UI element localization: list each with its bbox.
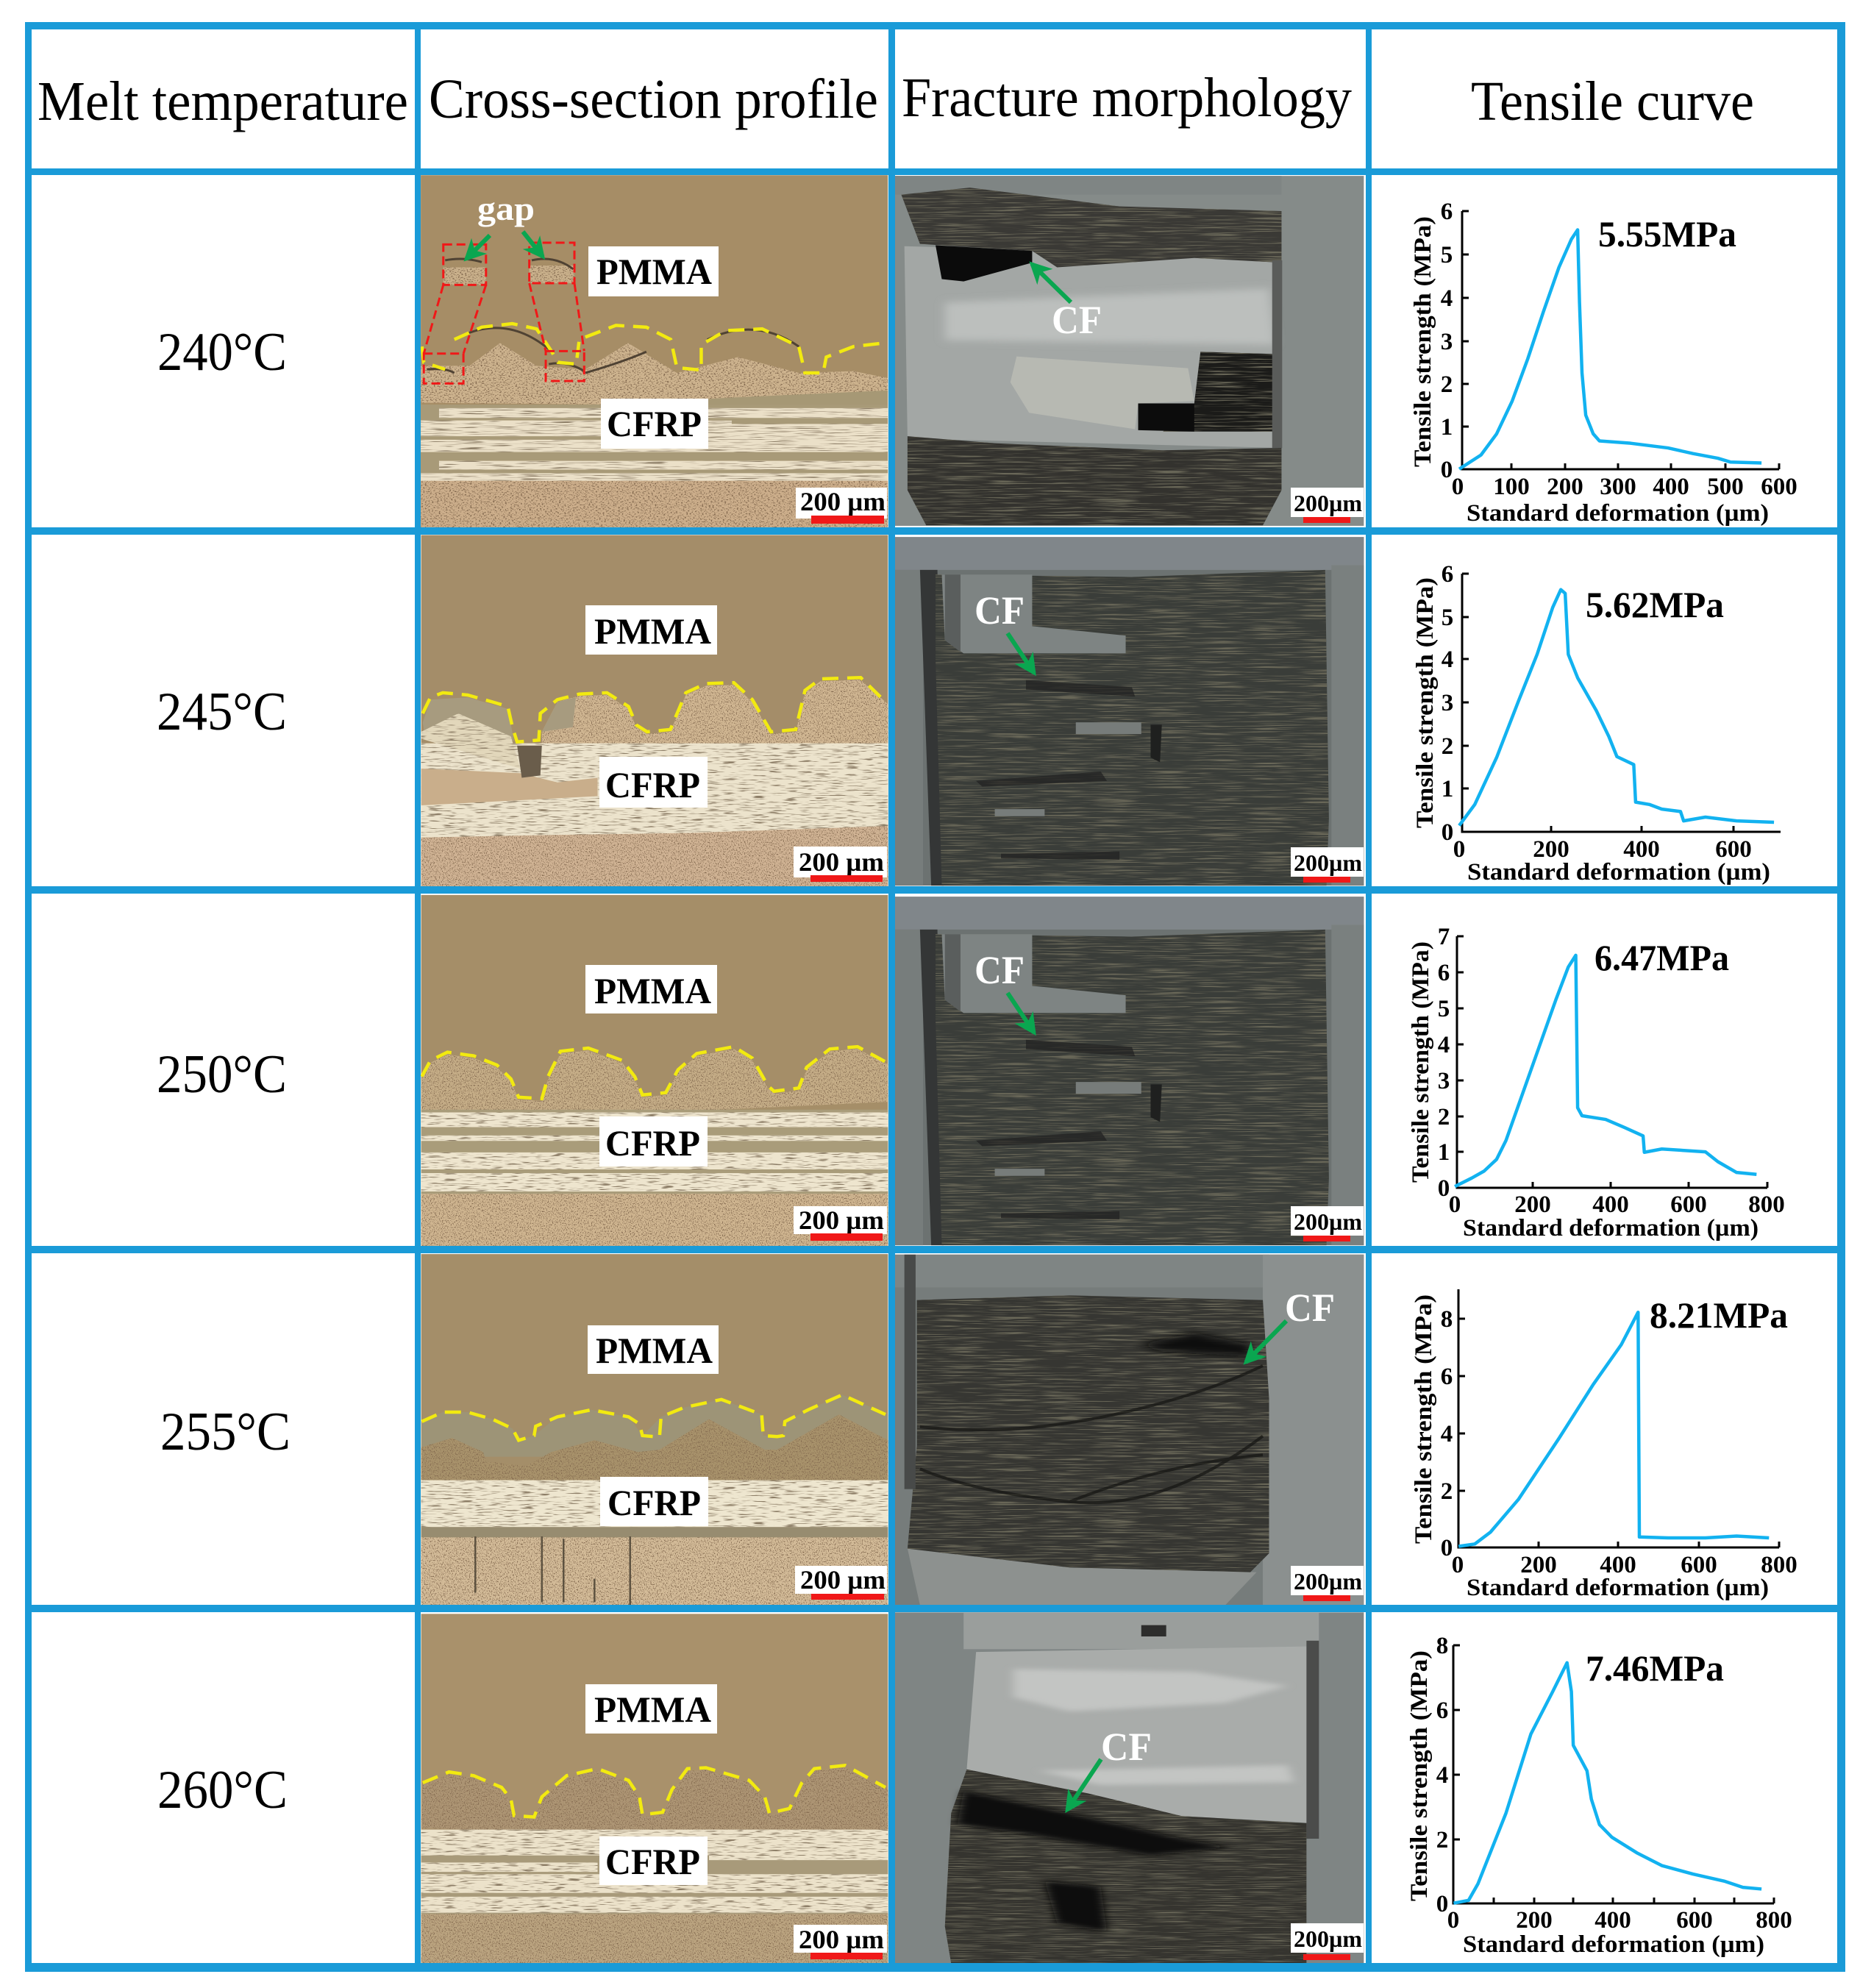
x axis title: Standard deformation (µm)	[1463, 1215, 1759, 1241]
scale bar: 200 µm	[799, 847, 884, 877]
y ticks: 2	[1436, 1827, 1448, 1853]
scale bar: 200µm	[1294, 1208, 1362, 1235]
y ticks	[1442, 561, 1453, 846]
y ticks: 4	[1441, 285, 1453, 312]
y ticks: 0	[1441, 457, 1453, 483]
x ticks: 400	[1623, 836, 1660, 863]
x ticks: 800	[1761, 1552, 1797, 1578]
curve	[1455, 955, 1756, 1186]
y ticks: 1	[1438, 1139, 1450, 1166]
panel: cross-section 255C	[421, 1254, 888, 1605]
x ticks: 600	[1681, 1552, 1717, 1578]
x ticks: 0	[1452, 1552, 1464, 1578]
red dashed gap zoom boxes	[424, 243, 584, 383]
value: 5.55MPa	[1598, 213, 1736, 254]
axes	[1462, 211, 1779, 469]
PMMA tag: PMMA	[596, 251, 712, 292]
y ticks: 0	[1441, 1535, 1453, 1561]
x ticks: 400	[1594, 1907, 1631, 1934]
y ticks: 2	[1442, 733, 1453, 760]
scale bar: 200 µm	[799, 1925, 884, 1954]
CFRP tag: CFRP	[607, 1482, 701, 1523]
y ticks: 3	[1442, 690, 1453, 716]
scale bar: 200µm	[1294, 490, 1362, 516]
value: 5.62MPa	[1586, 584, 1724, 625]
heading: melt temperature: Melt temperature	[38, 71, 408, 132]
temperature labels column	[157, 322, 291, 1820]
x ticks	[1449, 1191, 1785, 1218]
scale bar: 200µm	[1294, 1568, 1362, 1595]
y ticks: 4	[1436, 1762, 1448, 1789]
CFRP tag: CFRP	[605, 1841, 700, 1882]
CF label: CF	[974, 948, 1025, 992]
panel: fracture 245C	[895, 537, 1364, 886]
curve	[1458, 1312, 1769, 1546]
axes	[1462, 574, 1781, 832]
y ticks	[1438, 924, 1450, 1202]
PMMA tag: PMMA	[594, 970, 711, 1011]
y ticks: 6	[1441, 1364, 1453, 1390]
x ticks: 0	[1449, 1191, 1461, 1218]
CFRP tag: CFRP	[605, 764, 700, 805]
arrow to CF	[1246, 1321, 1286, 1362]
label: 260 C: 260°C	[157, 1760, 288, 1820]
yellow dashed interface	[422, 324, 884, 373]
y ticks: 5	[1442, 605, 1453, 631]
y ticks: 4	[1441, 1421, 1453, 1447]
yellow dashed interface	[423, 1765, 886, 1817]
PMMA tag: PMMA	[594, 610, 711, 652]
scale bar: 200µm	[1294, 849, 1362, 876]
heading: cross-section profile: Cross-section profile	[429, 68, 878, 130]
y ticks: 7	[1438, 924, 1450, 950]
arrow to CF	[1008, 633, 1034, 673]
y ticks: 8	[1436, 1633, 1448, 1659]
chart: tensile curve 245C	[1412, 561, 1781, 886]
y ticks: 6	[1436, 1697, 1448, 1724]
yellow dashed interface	[423, 677, 886, 742]
label: 245 C: 245°C	[157, 682, 287, 742]
arrow to CF	[1008, 993, 1034, 1033]
y axis title: Tensile strength (MPa)	[1408, 941, 1434, 1183]
x ticks: 800	[1756, 1907, 1792, 1934]
x axis title: Standard deformation (µm)	[1467, 500, 1769, 527]
x ticks: 0	[1447, 1907, 1459, 1934]
x ticks: 0	[1452, 474, 1464, 500]
chart: tensile curve 240C	[1410, 199, 1797, 527]
y ticks: 5	[1438, 996, 1450, 1022]
y ticks: 4	[1442, 646, 1453, 673]
x ticks	[1452, 1552, 1797, 1578]
x ticks: 600	[1676, 1907, 1713, 1934]
y ticks	[1441, 1306, 1453, 1561]
scale bar: 200 µm	[800, 1565, 886, 1595]
chart: tensile curve 260C	[1406, 1633, 1792, 1958]
x ticks: 400	[1600, 1552, 1636, 1578]
value: 7.46MPa	[1586, 1647, 1724, 1689]
y ticks: 4	[1438, 1032, 1450, 1058]
x ticks: 800	[1748, 1191, 1785, 1218]
axes	[1453, 1645, 1774, 1903]
x ticks: 200	[1547, 474, 1583, 500]
CFRP tag: CFRP	[607, 403, 702, 444]
arrow to CF	[1067, 1759, 1101, 1810]
y ticks: 2	[1441, 371, 1453, 398]
CF label: CF	[1052, 298, 1102, 342]
value: 6.47MPa	[1594, 937, 1729, 978]
y ticks: 3	[1438, 1068, 1450, 1094]
x ticks: 200	[1520, 1552, 1557, 1578]
PMMA tag: PMMA	[596, 1330, 713, 1371]
CF label: CF	[1285, 1286, 1335, 1330]
CFRP tag: CFRP	[605, 1122, 700, 1164]
panel: fracture 240C	[895, 176, 1364, 526]
yellow dashed interface	[421, 1047, 886, 1099]
y ticks: 6	[1441, 199, 1453, 225]
heading: tensile curve: Tensile curve	[1471, 71, 1754, 132]
panel: cross-section 260C	[421, 1614, 888, 1964]
x ticks: 200	[1533, 836, 1569, 863]
x axis title: Standard deformation (µm)	[1467, 859, 1770, 886]
heading: fracture morphology: Fracture morphology	[902, 67, 1352, 129]
x ticks	[1452, 474, 1797, 500]
panel: fracture 260C	[895, 1612, 1364, 1963]
y ticks: 2	[1441, 1478, 1453, 1505]
x ticks: 400	[1653, 474, 1689, 500]
curve	[1453, 1663, 1761, 1903]
header row	[38, 67, 1754, 132]
x ticks	[1453, 836, 1752, 863]
PMMA tag: PMMA	[594, 1689, 711, 1730]
y ticks: 5	[1441, 242, 1453, 268]
value: 8.21MPa	[1650, 1294, 1788, 1336]
x ticks: 100	[1493, 474, 1530, 500]
axes	[1458, 1289, 1779, 1547]
y ticks: 0	[1442, 819, 1453, 846]
x ticks: 300	[1600, 474, 1636, 500]
x ticks	[1447, 1907, 1792, 1934]
chart: tensile curve 255C	[1411, 1289, 1797, 1601]
label: 240 C: 240°C	[157, 322, 287, 382]
x ticks: 500	[1707, 474, 1744, 500]
x axis title: Standard deformation (µm)	[1463, 1931, 1764, 1958]
chart: tensile curve 250C	[1408, 924, 1785, 1241]
x axis title: Standard deformation (µm)	[1467, 1575, 1769, 1601]
label: 255 C: 255°C	[160, 1402, 291, 1462]
scale bar: 200 µm	[800, 487, 886, 516]
scale bar	[1291, 1923, 1364, 1960]
y ticks: 1	[1441, 414, 1453, 441]
y ticks: 3	[1441, 329, 1453, 355]
scale bar: 200 µm	[799, 1205, 884, 1235]
y ticks	[1441, 199, 1453, 483]
panel: cross-section 245C	[421, 535, 888, 886]
axes	[1457, 936, 1767, 1188]
y ticks: 6	[1442, 561, 1453, 588]
panel: fracture 255C	[895, 1255, 1364, 1606]
y axis title: Tensile strength (MPa)	[1412, 577, 1439, 828]
CF label: CF	[974, 588, 1025, 633]
x ticks: 0	[1453, 836, 1465, 863]
panel: cross-section 250C	[421, 895, 888, 1246]
curve	[1459, 229, 1761, 469]
CF label: CF	[1101, 1725, 1152, 1769]
y ticks: 1	[1442, 776, 1453, 802]
panel: fracture 250C	[895, 897, 1364, 1245]
arrow: gap left	[466, 235, 490, 259]
label: 250 C: 250°C	[157, 1044, 287, 1105]
x ticks: 600	[1670, 1191, 1707, 1218]
y ticks: 2	[1438, 1104, 1450, 1130]
y ticks: 8	[1441, 1306, 1453, 1333]
x ticks: 200	[1514, 1191, 1551, 1218]
x ticks: 400	[1592, 1191, 1629, 1218]
x ticks: 200	[1516, 1907, 1553, 1934]
x ticks: 600	[1761, 474, 1797, 500]
y ticks: 6	[1438, 960, 1450, 986]
y axis title: Tensile strength (MPa)	[1406, 1650, 1433, 1901]
arrow: gap right	[523, 232, 543, 257]
y axis title: Tensile strength (MPa)	[1410, 216, 1436, 467]
y ticks: 0	[1438, 1175, 1450, 1202]
y axis title: Tensile strength (MPa)	[1411, 1294, 1437, 1544]
arrow to CF	[1032, 264, 1071, 302]
scale bar: 200µm	[1294, 1925, 1362, 1952]
x ticks: 600	[1715, 836, 1752, 863]
y ticks	[1436, 1633, 1448, 1917]
gap label: gap	[477, 190, 535, 227]
curve	[1459, 590, 1774, 825]
yellow dashed interface	[421, 1394, 886, 1440]
y ticks: 0	[1436, 1891, 1448, 1917]
panel: cross-section 240C	[421, 175, 888, 527]
